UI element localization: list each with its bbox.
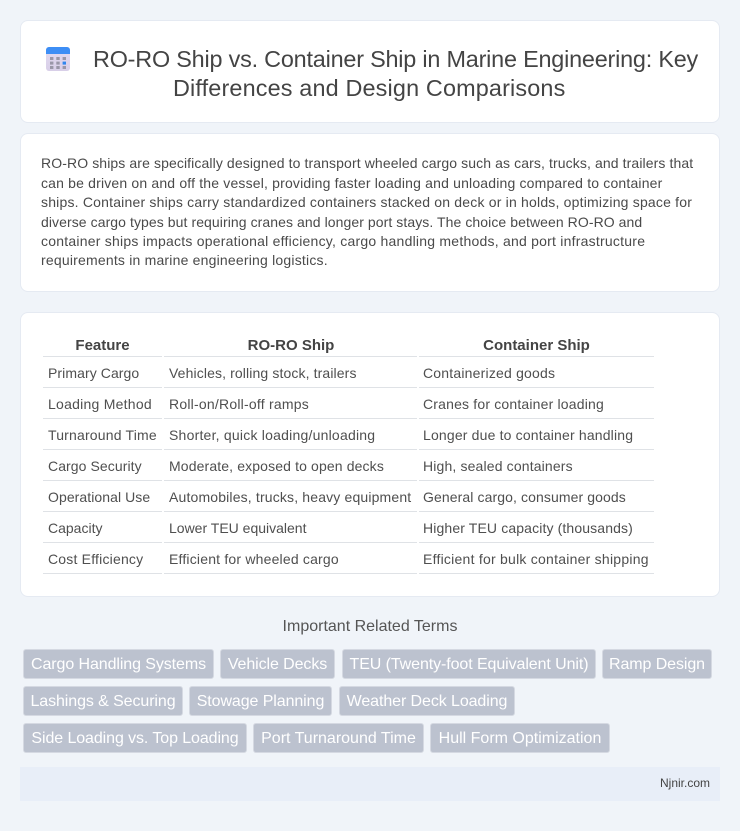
text block: intro: diverse cargo types but requiring cranes and longer port stays. The choice between RO-RO and xyxy=(41,214,642,230)
table: comparison: Loading Method xyxy=(48,396,152,412)
table: comparison: Turnaround Time xyxy=(48,427,157,443)
table: comparison: Efficient for wheeled cargo xyxy=(169,551,339,567)
panel: intro paragraph xyxy=(20,133,720,292)
panel: comparison table xyxy=(20,312,720,597)
table: comparison: Lower TEU equivalent xyxy=(169,520,306,536)
heading: related terms: Important Related Terms xyxy=(283,618,457,635)
table: comparison xyxy=(43,337,654,574)
text block: intro: ships. Container ships carry standardized containers stacked on deck or in holds, optimizing space for xyxy=(41,194,692,210)
table: comparison: Container Ship xyxy=(483,337,590,354)
table: comparison: Operational Use xyxy=(48,489,150,505)
table: comparison: Cost Efficiency xyxy=(48,551,143,567)
panel: title card xyxy=(20,20,720,123)
table: comparison: Automobiles, trucks, heavy equipment xyxy=(169,489,411,505)
tags: related terms: Stowage Planning xyxy=(197,693,324,710)
table: comparison: Higher TEU capacity (thousands) xyxy=(423,520,633,536)
tags: related terms: TEU (Twenty-foot Equivalent Unit) xyxy=(350,656,588,673)
table: comparison: Capacity xyxy=(48,520,102,536)
table: comparison: Feature xyxy=(75,337,130,354)
text block: intro: can be driven on and off the vessel, providing faster loading and unloading compared to container xyxy=(41,175,662,191)
table: comparison: Efficient for bulk container shipping xyxy=(423,551,649,567)
table: comparison: Primary Cargo xyxy=(48,365,139,381)
table: comparison: Cranes for container loading xyxy=(423,396,604,412)
text block: intro: requirements in marine engineering logistics. xyxy=(41,252,328,268)
table: comparison: General cargo, consumer goods xyxy=(423,489,626,505)
tags: related terms: Port Turnaround Time xyxy=(261,730,416,747)
icon: calendar grid xyxy=(46,47,70,71)
text block: intro xyxy=(41,155,694,268)
table: comparison: Containerized goods xyxy=(423,365,555,381)
tags: related terms xyxy=(23,649,712,753)
text block: intro: container ships impacts operational efficiency, cargo handling methods, and port infrastructure xyxy=(41,233,645,249)
title: RO-RO Ship vs. Container Ship in Marine Engineering: Key xyxy=(93,46,698,72)
footer bar xyxy=(20,767,720,801)
tags: related terms: Hull Form Optimization xyxy=(439,730,601,747)
tags: related terms: Cargo Handling Systems xyxy=(31,656,206,673)
footer credit: Njnir.com xyxy=(660,776,710,790)
title: Differences and Design Comparisons xyxy=(173,75,565,101)
title xyxy=(93,46,698,101)
table: comparison: High, sealed containers xyxy=(423,458,573,474)
tags: related terms: Lashings & Securing xyxy=(30,693,176,710)
table: comparison: Shorter, quick loading/unloading xyxy=(169,427,375,443)
tags: related terms: Ramp Design xyxy=(609,656,705,673)
text block: intro: RO-RO ships are specifically designed to transport wheeled cargo such as cars, trucks, and trailers that xyxy=(41,155,693,171)
table: comparison: Longer due to container handling xyxy=(423,427,633,443)
tags: related terms: Side Loading vs. Top Loading xyxy=(31,730,239,747)
table: comparison: Vehicles, rolling stock, trailers xyxy=(169,365,357,381)
tags: related terms: Weather Deck Loading xyxy=(347,693,507,710)
tags: related terms: Vehicle Decks xyxy=(228,656,327,673)
table: comparison: RO-RO Ship xyxy=(248,337,334,354)
table: comparison: Moderate, exposed to open decks xyxy=(169,458,384,474)
table: comparison: Cargo Security xyxy=(48,458,142,474)
table: comparison: Roll-on/Roll-off ramps xyxy=(169,396,309,412)
